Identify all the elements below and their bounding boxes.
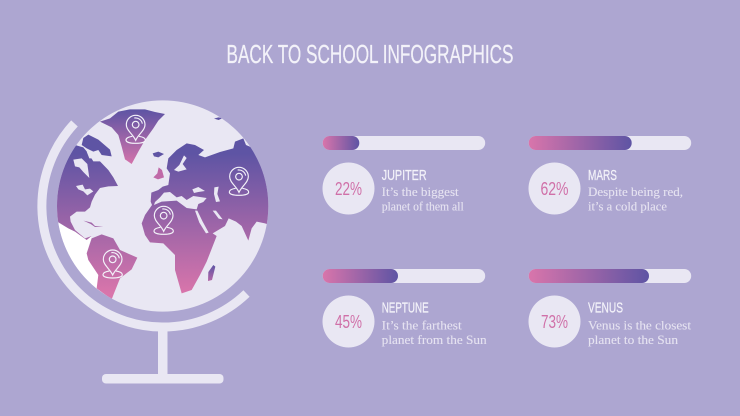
pin: Greenland [126, 115, 145, 143]
Greenland [100, 109, 165, 164]
panel: Venus [528, 269, 692, 348]
continents [50, 109, 273, 299]
description: Despite being red, [588, 185, 683, 199]
planet name: JUPITER [382, 167, 427, 184]
description: planet from the Sun [382, 333, 487, 347]
planet name: VENUS [588, 299, 623, 316]
Madagascar [208, 265, 215, 281]
description: It’s the biggest [382, 185, 459, 199]
British Isles [153, 167, 164, 179]
North America [57, 145, 118, 240]
percent value: 22% [335, 179, 362, 199]
progress track [529, 136, 691, 150]
globe stand base [102, 374, 224, 384]
title: BACK TO SCHOOL INFOGRAPHICS [226, 39, 514, 69]
progress fill 45% [323, 269, 398, 283]
Iceland [153, 152, 164, 157]
arctic islands [82, 135, 112, 156]
planet name: NEPTUNE [382, 299, 429, 316]
panel: Neptune [322, 269, 487, 348]
pin: Asia [229, 167, 249, 195]
Hudson Bay [73, 158, 89, 178]
percent badge [322, 162, 374, 214]
progress fill 22% [323, 136, 359, 150]
pacific sea highlight [58, 222, 98, 289]
Caspian Sea [214, 187, 220, 202]
description: planet to the Sun [588, 333, 678, 347]
planet name: MARS [588, 167, 617, 184]
globe stand arc [42, 123, 246, 327]
panel: Jupiter [322, 136, 485, 214]
Mediterranean Sea [154, 192, 207, 209]
description: Venus is the closest [588, 318, 692, 332]
globe stand pole [158, 327, 168, 377]
progress track [323, 269, 485, 283]
Red Sea [195, 211, 209, 233]
Baltic Sea [174, 155, 187, 172]
Persian Gulf [213, 211, 223, 219]
Black Sea [192, 187, 205, 193]
percent value: 45% [335, 312, 362, 332]
description: It’s the farthest [382, 318, 462, 332]
panel: Mars [528, 136, 691, 214]
progress fill 73% [529, 269, 649, 283]
Caribbean islands [83, 221, 103, 227]
percent value: 62% [540, 179, 568, 199]
percent badge [528, 162, 580, 214]
pin: South America [103, 250, 122, 278]
globe illustration [42, 100, 273, 384]
South America [87, 234, 137, 299]
progress fill 62% [529, 136, 632, 150]
progress track [323, 136, 485, 150]
Eurasia and Africa [142, 138, 273, 293]
pin: Africa [154, 206, 173, 234]
Baffin sea gap [86, 152, 92, 158]
Svalbard [214, 117, 223, 120]
progress track [529, 269, 691, 283]
percent badge [322, 296, 374, 348]
description: planet of them all [382, 200, 464, 214]
globe sphere [57, 100, 268, 312]
percent badge [528, 296, 580, 348]
description: it’s a cold place [588, 200, 668, 214]
globe world map [50, 100, 273, 312]
great lakes [76, 185, 93, 195]
percent value: 73% [541, 312, 568, 332]
